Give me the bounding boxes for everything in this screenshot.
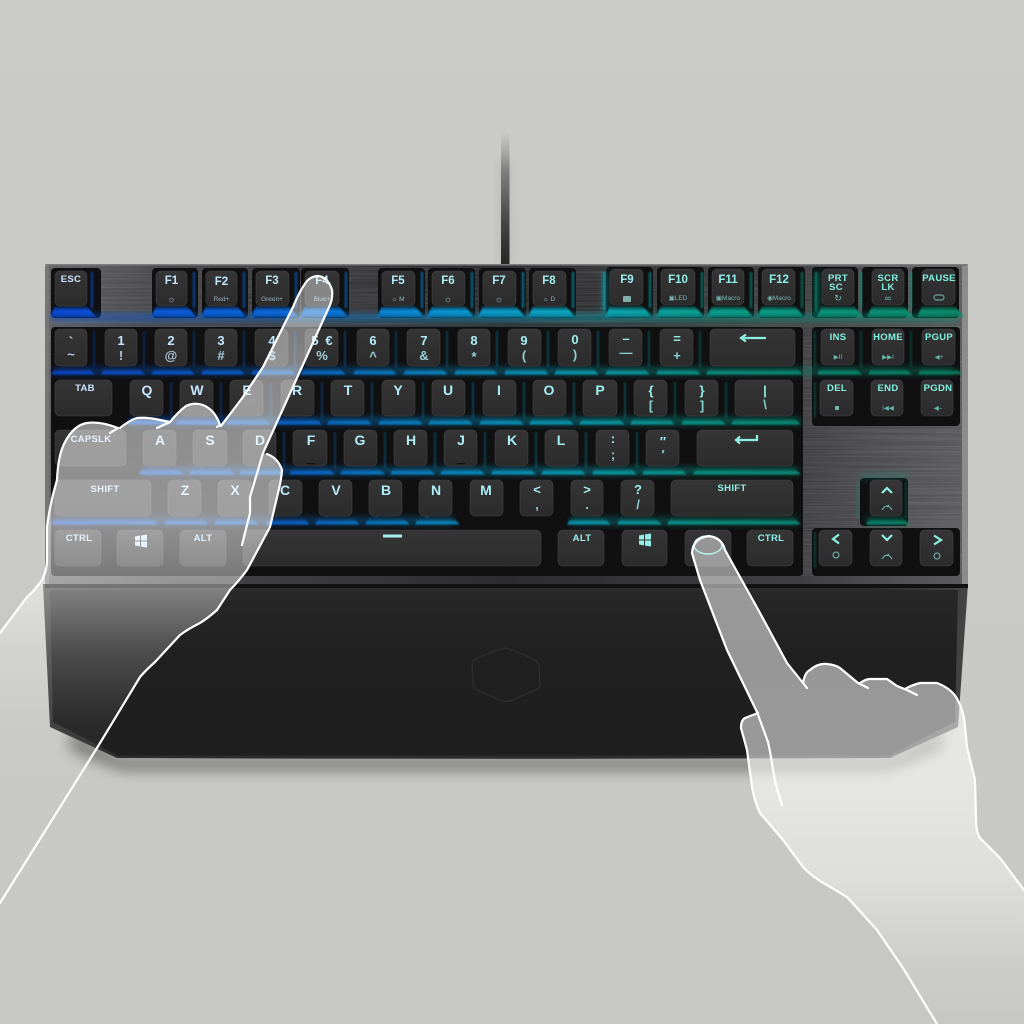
key: 4: $ — [268, 348, 276, 363]
key: F3: F3 — [265, 275, 279, 287]
key: Space — [243, 530, 541, 566]
key: F10 — [661, 269, 695, 305]
key: 1: 1 — [117, 333, 125, 348]
key: left Windows — [117, 530, 163, 566]
key: left brace: { — [648, 383, 654, 398]
key: right brace: ] — [700, 398, 704, 413]
right hand little finger and outer wrist — [905, 683, 1024, 890]
key: 4: 4 — [268, 333, 276, 348]
key: left brace — [634, 380, 667, 416]
key: F9: F9 — [620, 274, 634, 286]
key: H: H — [406, 432, 416, 448]
key: backslash: | — [763, 383, 767, 398]
key: 2: @ — [165, 348, 177, 363]
key: Q — [130, 380, 163, 416]
key: right Windows — [622, 530, 667, 566]
palm rest logo — [472, 648, 540, 702]
left hand translucent fill — [0, 276, 332, 903]
left hand outline pressing F4 and left keys — [0, 276, 332, 903]
key: B — [369, 480, 402, 516]
key: T — [331, 380, 364, 416]
key: left Alt — [180, 530, 226, 566]
key: 5: % — [316, 348, 328, 363]
key: 6 — [357, 329, 389, 366]
key: X: X — [230, 482, 240, 498]
key: C: C — [280, 482, 290, 498]
key: 0: 0 — [571, 332, 579, 347]
key: A: A — [155, 432, 165, 448]
key: semicolon: ; — [611, 447, 615, 462]
right hand index finger — [692, 536, 807, 805]
key: F8: ☼ D — [543, 296, 556, 303]
key: M — [470, 480, 503, 516]
palm rest body — [43, 584, 968, 759]
key: G — [344, 430, 377, 466]
key: F5: F5 — [391, 275, 405, 287]
keyboard cable — [498, 130, 512, 264]
key: right brace — [685, 380, 718, 416]
key: period: . — [585, 497, 589, 512]
key: G: G — [355, 432, 366, 448]
key: X — [218, 480, 251, 516]
key: Page Up: PGUP — [925, 332, 953, 343]
key: F4: Blue+ — [314, 296, 331, 303]
key: F9 — [610, 269, 643, 305]
key: U — [432, 380, 465, 416]
key: Pause — [922, 269, 956, 305]
key: F5: ☼ M — [391, 296, 405, 303]
bottom letter key row — [55, 480, 902, 516]
right hand ring finger knuckle — [860, 679, 917, 695]
key: Y — [382, 380, 415, 416]
key: Z — [168, 480, 201, 516]
key: 2: 2 — [167, 333, 175, 348]
key: F12: F12 — [769, 274, 789, 286]
key: F11: ▣Macro — [716, 295, 740, 302]
key: tilde — [55, 329, 87, 366]
key: slash — [621, 480, 654, 516]
key: Insert: ▶II — [834, 354, 842, 361]
key: Tab — [55, 380, 112, 416]
key: 9 — [508, 329, 541, 366]
left hand ring finger knuckle — [120, 418, 170, 428]
key: backslash — [735, 380, 793, 416]
key: I: I — [497, 382, 501, 398]
key: Insert: INS — [830, 332, 846, 343]
key: Right arrow — [920, 530, 953, 566]
RGB backlight glow halo — [52, 272, 958, 524]
key: N — [419, 480, 452, 516]
key: N: N — [431, 482, 441, 498]
key: semicolon: : — [611, 431, 615, 446]
key: left brace: [ — [649, 398, 654, 413]
key: F2: F2 — [215, 276, 228, 288]
key: Left arrow — [819, 530, 852, 566]
key: F12: ◉Macro — [767, 295, 791, 302]
keyboard plate — [45, 264, 968, 588]
key: minus: – — [622, 331, 630, 346]
key: F6 — [432, 271, 465, 306]
key: End: I◀◀ — [882, 405, 894, 412]
right hand thumb and inner wrist — [741, 713, 937, 1024]
key: F7: ☼ — [495, 294, 503, 304]
key: V: V — [331, 482, 341, 498]
key: 0 — [558, 329, 591, 366]
RGB backlight skirts — [45, 264, 968, 584]
key: Caps Lock — [55, 430, 126, 466]
right hand middle finger knuckle — [803, 664, 868, 688]
key: 8: 8 — [470, 333, 478, 348]
modifier key row — [55, 530, 953, 566]
key: Scroll Lock: ∞ — [885, 293, 891, 303]
palm rest shadow — [70, 730, 945, 770]
key: Print Screen: PRT — [828, 273, 848, 284]
key: Tab: TAB — [75, 383, 95, 394]
home key row — [55, 430, 793, 466]
key: M: M — [480, 482, 492, 498]
key: F10: ▣LED — [669, 295, 688, 302]
key: Home: ▶▶I — [882, 354, 894, 361]
key: Down arrow — [870, 530, 902, 566]
key: minus: — — [620, 345, 632, 360]
key: Pause: PAUSE — [922, 273, 956, 284]
key: 8 — [458, 329, 490, 366]
key: E — [230, 380, 263, 416]
key: F1: ☼ — [167, 294, 176, 304]
key: E: E — [242, 382, 252, 398]
key: slash: / — [636, 497, 640, 512]
key: K — [495, 430, 528, 466]
key: tilde: ~ — [67, 347, 75, 362]
key: F1: F1 — [165, 275, 179, 287]
key: Home — [872, 329, 904, 365]
key: 9: ( — [522, 348, 527, 363]
key: 3: # — [217, 348, 225, 363]
key: Page Down — [921, 380, 953, 416]
key: F6: ☼ — [444, 294, 452, 304]
key: 5: € — [325, 333, 333, 348]
function key row — [55, 269, 956, 306]
key: left Alt: ALT — [194, 533, 212, 544]
key: End — [871, 380, 903, 416]
key: left Shift: SHIFT — [91, 484, 119, 495]
key: right Ctrl — [747, 530, 793, 566]
key: F1 — [156, 271, 187, 306]
key: Fn — [685, 530, 731, 566]
key: W — [180, 380, 213, 416]
key: Page Up: ◀+ — [935, 354, 944, 361]
key: semicolon — [596, 430, 629, 466]
key: 5: 5 — [311, 333, 319, 348]
key: F3: Green+ — [261, 296, 283, 303]
key: Page Down: ◀– — [934, 405, 943, 412]
left hand back and little finger — [0, 423, 118, 633]
key: right Shift: SHIFT — [718, 483, 746, 494]
key: quote: ″ — [660, 434, 666, 449]
key: Up arrow — [870, 480, 902, 516]
key: backslash: \ — [763, 397, 767, 412]
key: period — [571, 480, 603, 516]
QWERTY key row — [55, 380, 953, 416]
key: D: D — [255, 432, 265, 448]
key: Esc — [55, 271, 87, 306]
key: T: T — [344, 382, 353, 398]
key: right Ctrl: CTRL — [758, 533, 784, 544]
key: H — [394, 430, 427, 466]
key: Page Down: PGDN — [924, 383, 952, 394]
key: 1 — [105, 329, 137, 366]
key: F11: F11 — [718, 274, 738, 286]
key: Page Up — [922, 329, 955, 365]
key: equals: + — [673, 348, 681, 363]
key: period: > — [583, 482, 591, 497]
key: Q: Q — [142, 382, 153, 398]
key: V — [319, 480, 352, 516]
key: Z: Z — [181, 482, 190, 498]
key: Enter — [697, 430, 793, 466]
key: F2 — [206, 271, 237, 306]
key: R — [281, 380, 314, 416]
key: J — [444, 430, 477, 466]
key: comma: < — [533, 482, 541, 497]
key: right brace: } — [699, 383, 705, 398]
key: left Ctrl: CTRL — [66, 533, 92, 544]
key: 3 — [205, 329, 237, 366]
key: End: END — [878, 383, 898, 394]
left hand middle finger knuckle — [170, 404, 220, 427]
key: Print Screen — [822, 269, 854, 305]
key press contact ellipse — [694, 536, 722, 554]
key: tilde: ` — [69, 334, 73, 349]
key: slash: ? — [634, 482, 642, 497]
key: Scroll Lock: LK — [881, 282, 895, 293]
key: right Shift — [671, 480, 793, 516]
key: 1: ! — [119, 348, 123, 363]
key: Scroll Lock: SCR — [878, 273, 898, 284]
key: 8: * — [471, 349, 477, 364]
key: Print Screen: SC — [829, 282, 843, 293]
key: right Alt: ALT — [573, 533, 591, 544]
key: A — [143, 430, 176, 466]
key: P — [583, 380, 617, 416]
key: L: L — [557, 432, 566, 448]
key: F2: Red+ — [214, 296, 230, 303]
key: 6: ^ — [369, 349, 377, 364]
key: K: K — [507, 432, 517, 448]
key: I — [483, 380, 516, 416]
key: comma — [520, 480, 553, 516]
key: comma: , — [535, 497, 539, 512]
key: minus — [609, 329, 642, 366]
key: 7: 7 — [420, 333, 428, 348]
left hand thumb and wrist — [0, 454, 282, 903]
right hand outline pressing Fn key — [692, 536, 1024, 1024]
key: Delete — [820, 380, 853, 416]
key: 9: 9 — [520, 333, 528, 348]
key: F4: F4 — [315, 275, 329, 287]
key: R: R — [292, 382, 302, 398]
key: Delete: DEL — [827, 383, 847, 394]
key: 6: 6 — [369, 333, 377, 348]
key: Backspace — [710, 329, 795, 366]
key: O: O — [544, 382, 555, 398]
key: Print Screen: ↻ — [834, 293, 842, 303]
key: quote — [646, 430, 679, 466]
key: F10: F10 — [668, 274, 688, 286]
key: Esc: ESC — [61, 274, 81, 285]
key: F6: F6 — [441, 275, 455, 287]
key: F7: F7 — [492, 275, 506, 287]
key: C — [269, 480, 302, 516]
key: 7 — [407, 329, 440, 366]
key: D — [243, 430, 276, 466]
key: F11 — [712, 269, 744, 305]
key: P: P — [595, 382, 605, 398]
key: Insert — [821, 329, 854, 365]
key wells — [51, 267, 960, 576]
key: U: U — [443, 382, 453, 398]
key: Home: HOME — [873, 332, 903, 343]
key: 5 — [305, 329, 338, 366]
key: 2 — [155, 329, 187, 366]
key: equals: = — [673, 331, 681, 346]
key: F8 — [533, 271, 566, 306]
key: right Alt — [558, 530, 604, 566]
key: left Ctrl — [55, 530, 101, 566]
key: 7: & — [419, 348, 429, 363]
key: L — [545, 430, 578, 466]
key: W: W — [190, 382, 204, 398]
key: equals — [660, 329, 693, 366]
key: J: J — [457, 432, 465, 448]
palm rest cushion — [50, 590, 958, 756]
key: S — [193, 430, 227, 466]
key: F — [293, 430, 327, 466]
key: F12 — [762, 269, 795, 305]
key: left Shift — [55, 480, 151, 516]
key: B: B — [381, 482, 391, 498]
key: S: S — [205, 432, 215, 448]
right hand translucent fill — [692, 536, 1024, 1024]
key: F4 — [305, 271, 339, 306]
key: Scroll Lock — [872, 269, 904, 305]
key: 3: 3 — [217, 333, 225, 348]
key: O — [533, 380, 566, 416]
palm rest — [43, 584, 968, 770]
key: Caps Lock: CAPSLK — [71, 434, 111, 445]
key: Y: Y — [393, 382, 403, 398]
key: F7 — [483, 271, 516, 306]
key: F3 — [256, 271, 289, 306]
key: quote: ′ — [661, 447, 665, 462]
key: 4 — [255, 329, 288, 366]
key: F: F — [307, 432, 316, 448]
key: 0: ) — [573, 347, 577, 362]
left hand index finger — [221, 276, 332, 545]
number key row — [55, 329, 955, 366]
key: F5 — [382, 271, 415, 306]
key: F8: F8 — [542, 275, 556, 287]
